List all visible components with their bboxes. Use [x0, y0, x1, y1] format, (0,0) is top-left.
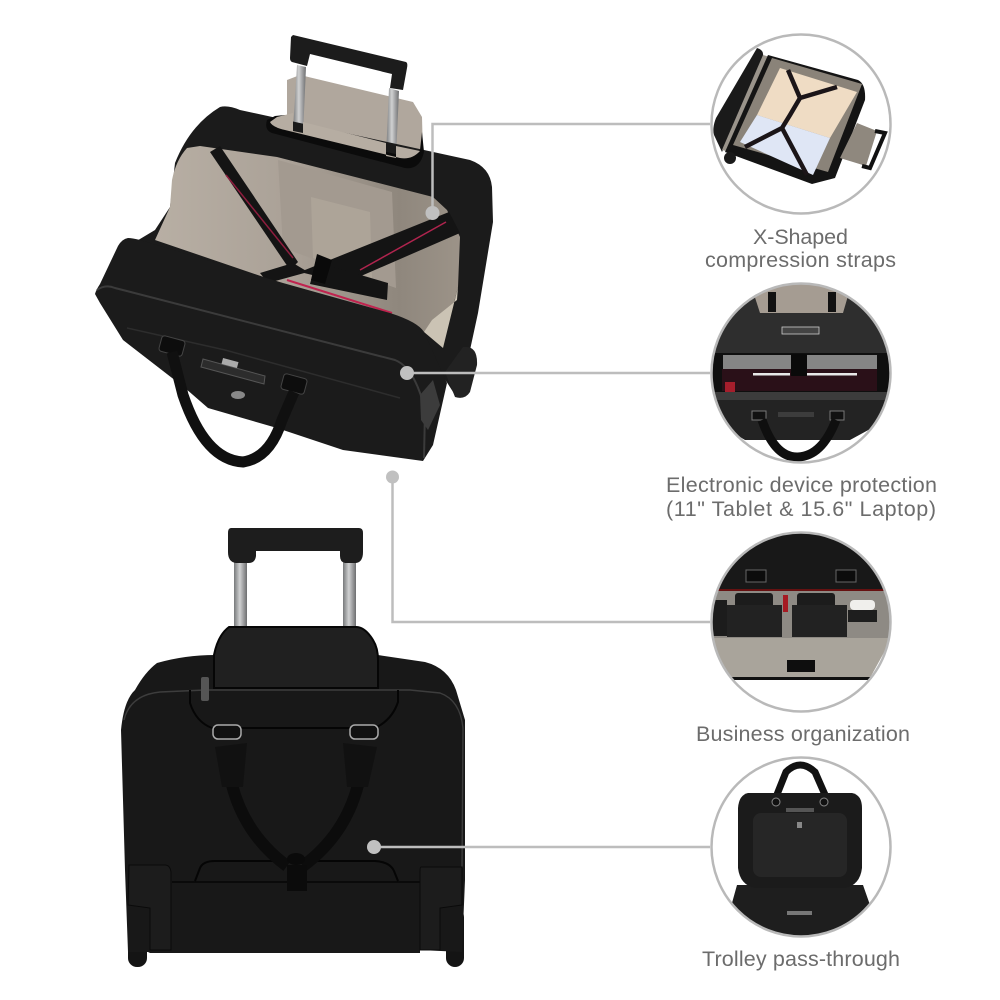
trolley grip [228, 528, 363, 563]
shell recess around pocket [266, 115, 424, 168]
interior frame panel [278, 160, 396, 288]
label: X-shaped compression straps: X-Shaped [753, 225, 848, 249]
main body [121, 655, 465, 953]
pale lining flap [424, 287, 458, 348]
infographic canvas [95, 33, 936, 970]
compression straps [210, 146, 460, 313]
circle outline [712, 532, 890, 712]
label: X-shaped compression straps: compression straps [705, 248, 896, 272]
handles [232, 785, 358, 866]
center clasp [287, 853, 307, 891]
leader lines and dots [367, 124, 710, 854]
zipper pull [201, 677, 209, 701]
wheels [128, 908, 464, 967]
carry handle [172, 352, 294, 462]
leader: business organization [386, 470, 710, 622]
leader: trolley pass-through [367, 840, 710, 854]
laptop bag on trolley [732, 762, 870, 936]
circle outline [712, 34, 890, 214]
trolley handle grip [290, 35, 407, 90]
main shell [130, 106, 493, 395]
top pad [214, 627, 378, 688]
leader: X-shaped straps [426, 124, 710, 220]
detail circle: business organization [710, 530, 892, 712]
handle tabs and rings [213, 725, 378, 787]
circle outline [712, 284, 890, 462]
label: electronic device protection [666, 473, 937, 521]
open bag top view [95, 35, 493, 462]
label: trolley pass-through: Trolley pass-through [702, 947, 900, 971]
open laptop compartment [710, 282, 892, 457]
wheel housings [128, 865, 462, 950]
detail circle: X-shaped straps [712, 34, 890, 214]
trolley handle rails [293, 65, 399, 158]
detail circle: electronic device protection [710, 282, 892, 462]
front lid [95, 238, 447, 461]
back pocket liner [287, 75, 423, 155]
seams [124, 690, 463, 882]
detail circle: trolley pass-through [710, 758, 890, 950]
label: business organization: Business organization [696, 722, 910, 746]
open suitcase with clothes [713, 48, 885, 184]
label: X-shaped compression straps [705, 225, 896, 272]
organizer pockets [710, 530, 892, 680]
label: electronic device protection: Electronic device protection [666, 473, 937, 497]
front lid organizer badge and tabs [158, 335, 308, 399]
rear bag view [121, 528, 465, 967]
circle outline [712, 758, 890, 936]
interior lining [155, 146, 460, 345]
trolley rails [234, 560, 356, 630]
leader: electronic device protection [400, 366, 710, 380]
label: electronic device protection: (11" Tablet & 15.6" Laptop) [666, 497, 936, 521]
side trim and wheel [420, 347, 477, 430]
